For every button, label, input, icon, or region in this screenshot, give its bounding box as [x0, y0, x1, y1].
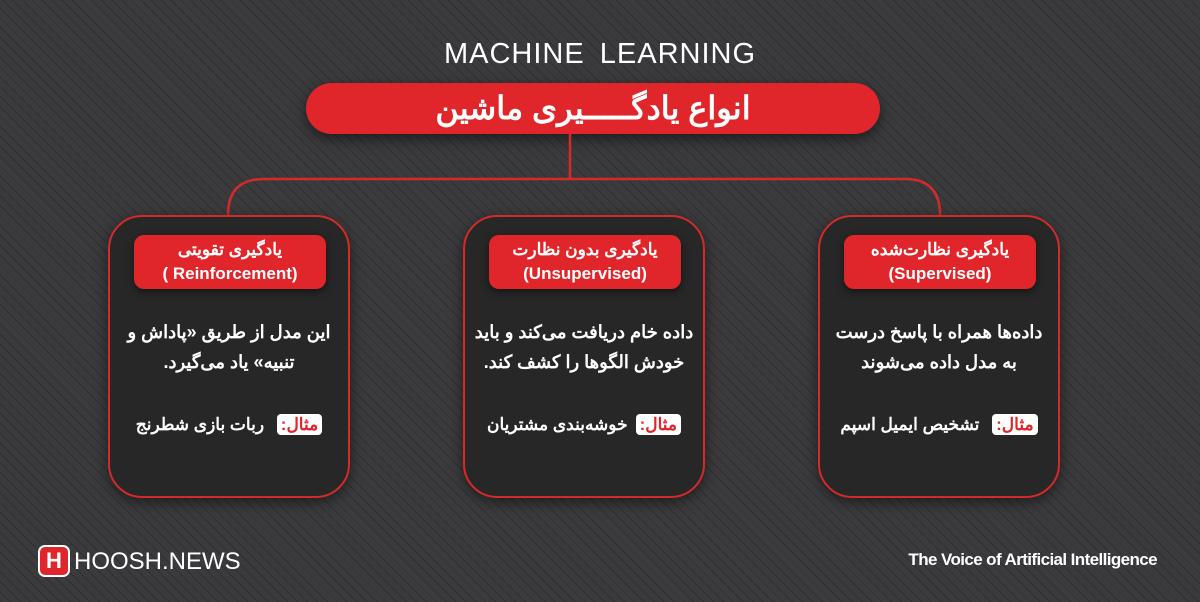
panel: unsupervised: [463, 215, 705, 498]
example: reinforcement: مثال: ربات بازی شطرنج: [136, 415, 318, 434]
heading pill: انواع یادگـــــیری ماشین: [435, 90, 751, 126]
heading pill: [306, 83, 880, 134]
title: MACHINE LEARNING: MACHINE LEARNING: [444, 38, 756, 70]
text: HOOSH.NEWS: HOOSH.NEWS: [74, 548, 241, 575]
text: unsupervised desc: داده خام دریافت می‌کند و باید خودش الگوها را کشف کند.: [475, 322, 693, 372]
text: supervised desc: داده‌ها همراه با پاسخ درست به مدل داده می‌شوند: [836, 322, 1042, 372]
panel: supervised: [818, 215, 1060, 498]
icon: logo: H: [46, 548, 62, 573]
tag: unsupervised: یادگیری بدون نظارت: [512, 240, 658, 259]
panel: reinforcement: [108, 215, 350, 498]
tag: supervised: [844, 235, 1036, 289]
tag: unsupervised: (Unsupervised): [523, 264, 647, 283]
tag: reinforcement: ( Reinforcement): [162, 264, 298, 283]
logo: hoosh.news: [38, 545, 241, 577]
tag: reinforcement: [134, 235, 326, 289]
tagline: The Voice of Artificial Intelligence: [908, 550, 1157, 569]
tag: unsupervised: [489, 235, 681, 289]
example: supervised: مثال: تشخیص ایمیل اسپم: [840, 415, 1034, 434]
text: reinforcement desc: این مدل از طریق «پاداش و تنبیه» یاد می‌گیرد.: [127, 322, 331, 372]
tag: supervised: یادگیری نظارت‌شده: [871, 240, 1009, 259]
example: unsupervised: مثال:خوشه‌بندی مشتریان: [487, 415, 677, 434]
tag: supervised: (Supervised): [888, 264, 991, 283]
tag: reinforcement: یادگیری تقویتی: [178, 240, 282, 259]
icon: logo: [38, 545, 70, 577]
